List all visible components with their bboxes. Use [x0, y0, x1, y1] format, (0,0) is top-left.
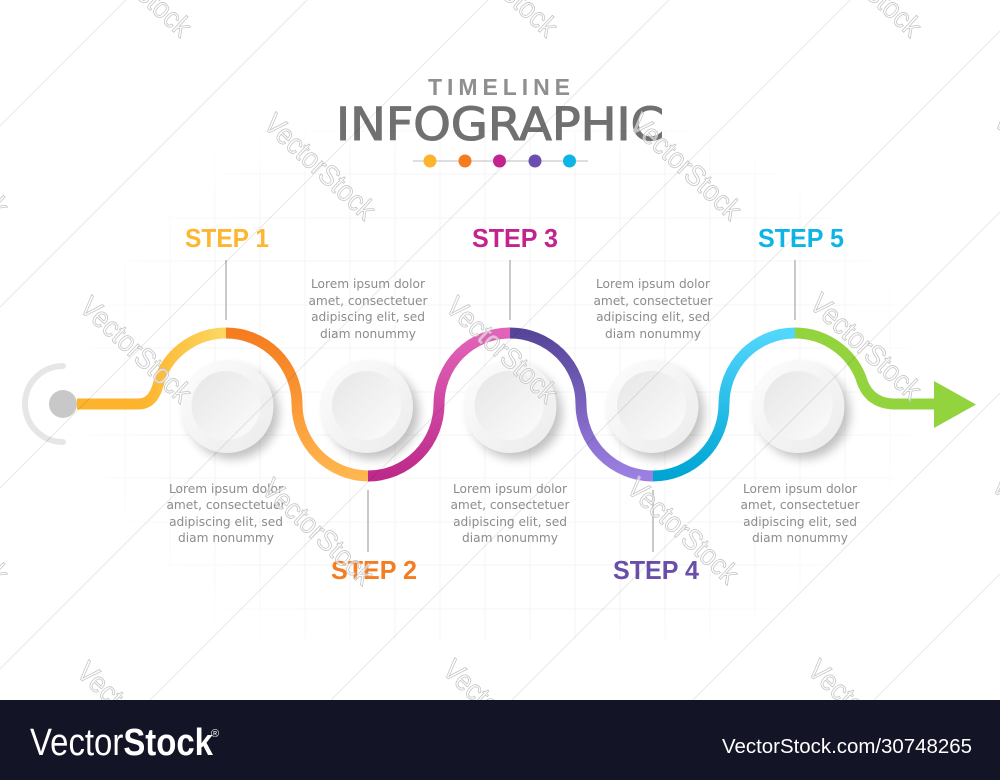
text block step 4: diam nonummy	[605, 327, 701, 341]
footer banner	[0, 700, 1000, 780]
start marker	[25, 366, 77, 442]
text block step 4: Lorem ipsum dolor	[596, 277, 711, 291]
watermarks: VectorStock	[255, 473, 380, 592]
text block step 5: adipiscing elit, sed	[743, 515, 857, 529]
text block step 2: adipiscing elit, sed	[311, 310, 425, 324]
step 2 label: STEP 2	[331, 555, 417, 585]
segment 3	[368, 333, 510, 476]
watermarks: VectorStock	[803, 288, 928, 407]
step 4 label: STEP 4	[613, 555, 700, 585]
watermarks: VectorStock	[623, 108, 748, 227]
text block step 4: adipiscing elit, sed	[596, 310, 710, 324]
text block step 5: amet, consectetuer	[740, 498, 861, 512]
text block step 3: diam nonummy	[462, 531, 558, 545]
disc 1	[180, 360, 279, 459]
watermarks: VectorStock	[439, 291, 564, 410]
disc 3	[464, 360, 562, 459]
text block step 1: adipiscing elit, sed	[169, 515, 283, 529]
disc 2	[320, 360, 419, 459]
watermarks: VectorStock	[73, 291, 198, 410]
title: INFOGRAPHIC: INFOGRAPHIC	[336, 98, 664, 151]
text block step 3: adipiscing elit, sed	[453, 515, 567, 529]
watermarks: VectorStock	[257, 108, 382, 227]
button discs	[180, 360, 850, 459]
step 5 label: STEP 5	[758, 223, 844, 253]
registered mark: ®	[211, 728, 219, 740]
segment 6	[795, 333, 940, 404]
title: TIMELINE: TIMELINE	[428, 74, 570, 100]
text block step 5: diam nonummy	[752, 531, 848, 545]
text block step 1: Lorem ipsum dolor	[169, 482, 284, 496]
step 1 label: STEP 1	[185, 223, 269, 253]
segment 5	[653, 333, 795, 476]
watermarks: VectorStock	[436, 654, 561, 773]
footer logo: VectorStock	[30, 722, 214, 764]
arrow head	[934, 381, 976, 428]
footer URL: VectorStock.com/30748265	[722, 736, 972, 758]
disc 5	[752, 360, 850, 459]
text block step 3: amet, consectetuer	[450, 498, 571, 512]
text block step 2: Lorem ipsum dolor	[311, 277, 426, 291]
text block step 4: amet, consectetuer	[593, 294, 714, 308]
watermarks: VectorStock	[801, 654, 926, 773]
text block step 2: amet, consectetuer	[308, 294, 429, 308]
segment 1	[77, 333, 226, 404]
watermarks: VectorStock	[620, 472, 745, 591]
text block step 2: diam nonummy	[320, 327, 416, 341]
segment 4	[510, 333, 653, 476]
segment 2	[226, 333, 368, 476]
title dots divider	[413, 154, 588, 168]
text block step 1: diam nonummy	[178, 531, 274, 545]
connector lines	[226, 260, 795, 552]
winding timeline path	[77, 333, 940, 476]
text block step 1: amet, consectetuer	[166, 498, 287, 512]
step 3 label: STEP 3	[472, 223, 558, 253]
text block step 3: Lorem ipsum dolor	[453, 482, 568, 496]
text block step 5: Lorem ipsum dolor	[743, 482, 858, 496]
disc 4	[606, 360, 704, 459]
